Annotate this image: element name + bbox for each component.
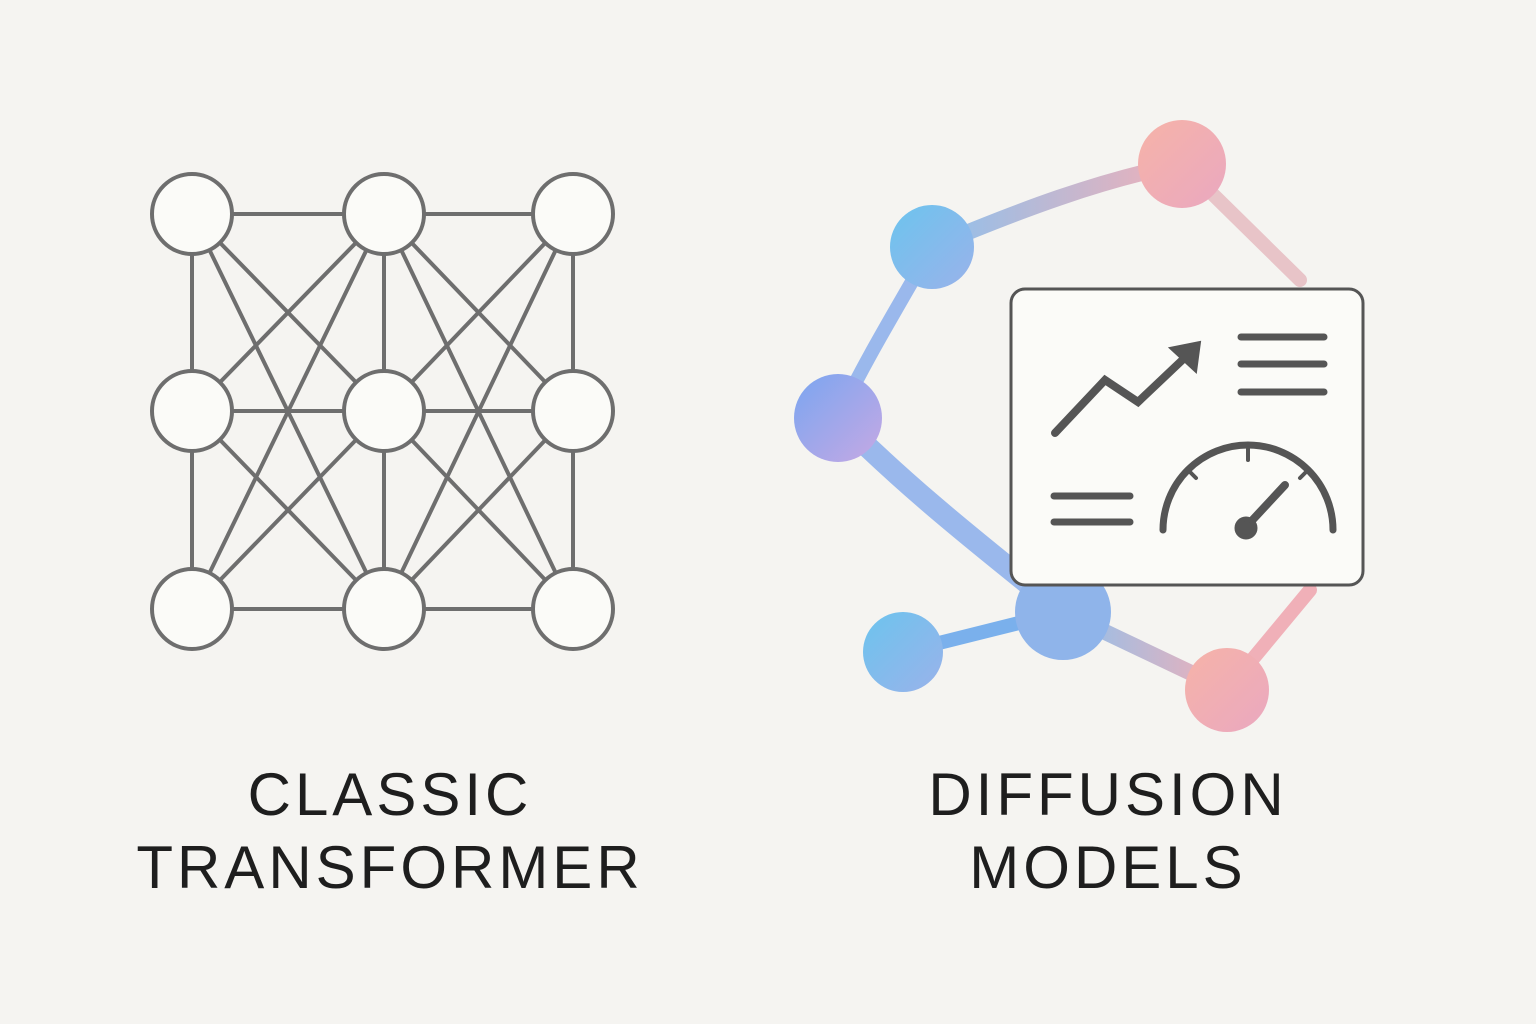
title: classic transformer <box>136 761 644 901</box>
title: diffusion models: MODELS <box>969 834 1247 901</box>
diffusion blobs <box>794 120 1310 732</box>
title: diffusion models <box>928 761 1288 901</box>
icon: gauge <box>1163 445 1333 530</box>
dashboard card <box>1011 289 1363 585</box>
title: classic transformer: TRANSFORMER <box>136 834 644 901</box>
title: diffusion models: DIFFUSION <box>928 761 1288 828</box>
title: classic transformer: CLASSIC <box>248 761 532 828</box>
text lines <box>1241 334 1324 340</box>
network: classic transformer <box>152 174 613 649</box>
icon: trend arrow <box>1055 348 1195 433</box>
